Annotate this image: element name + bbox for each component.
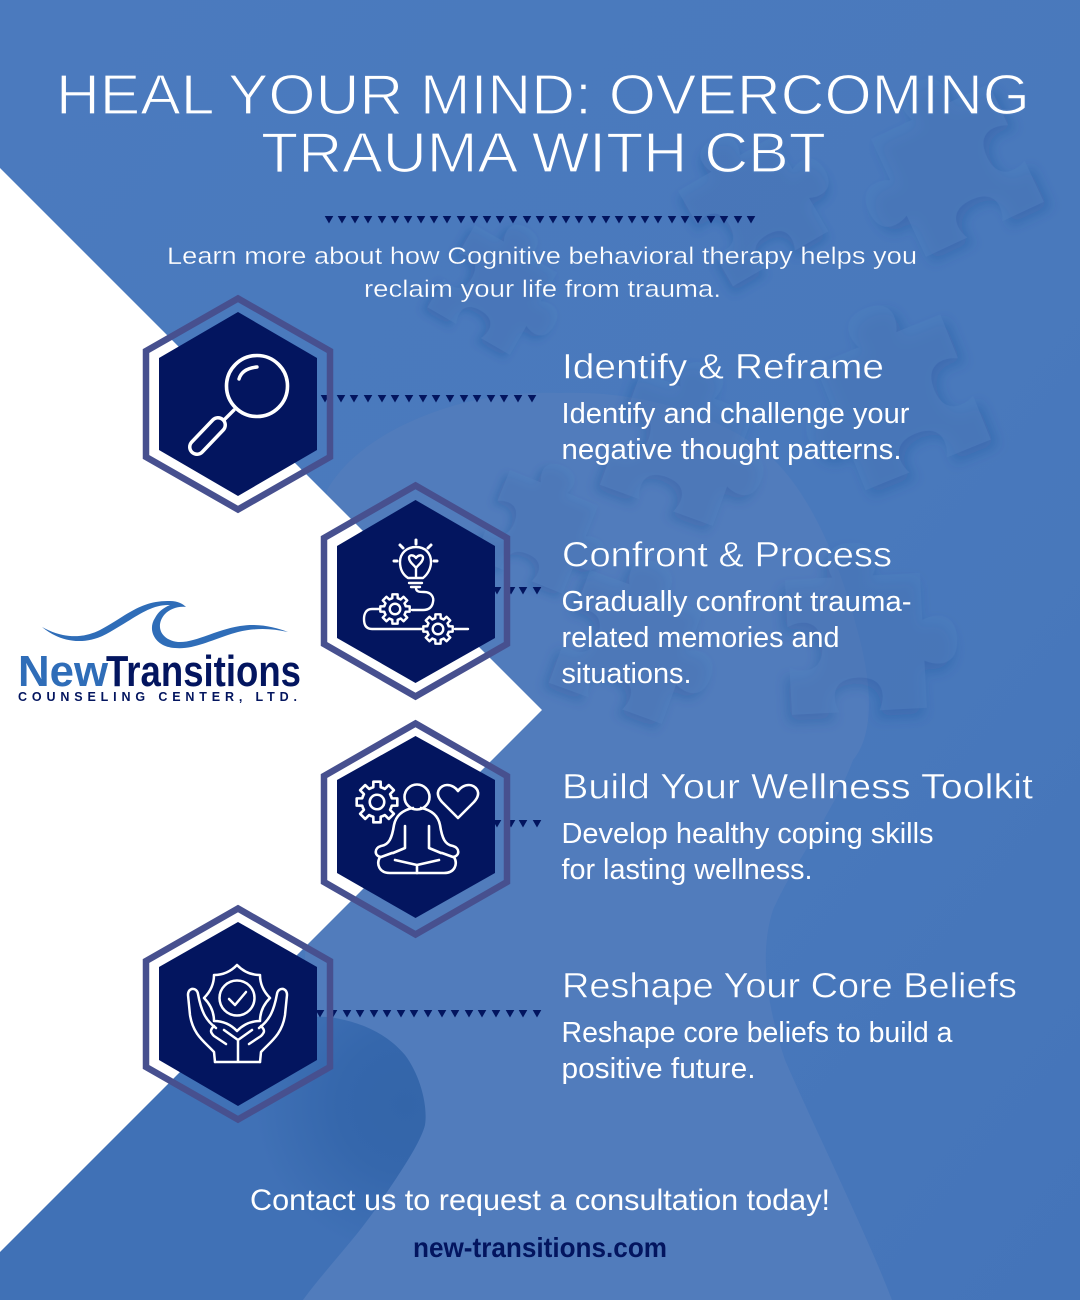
subtitle: reclaim your life from trauma. — [364, 276, 721, 303]
icon: hands holding badge — [188, 965, 287, 1062]
contact call to action: Contact us to request a consultation today! — [250, 1184, 830, 1217]
icon: lightbulb and gears — [364, 540, 468, 644]
title — [56, 63, 1030, 185]
hexagon: step 2 lightbulb and gears — [324, 486, 507, 696]
step 3 text: Develop healthy coping skills — [562, 818, 934, 850]
step 4 text: Reshape Your Core Beliefs — [562, 966, 1017, 1006]
connector: step 2 — [493, 587, 541, 594]
step 4 text — [562, 966, 1017, 1085]
puzzle pieces background — [428, 55, 1044, 734]
logo tagline: COUNSELING CENTER, LTD. — [18, 690, 297, 704]
step 2 text: related memories and — [562, 622, 840, 654]
step 2 text — [562, 536, 912, 690]
step 3 text: Build Your Wellness Toolkit — [562, 768, 1033, 806]
step 3 text: for lasting wellness. — [562, 854, 812, 886]
step 1 text: Identify and challenge your — [562, 398, 910, 430]
hexagon: step 4 hands and badge — [146, 908, 330, 1120]
icon: magnifying glass — [197, 356, 288, 447]
connector: step 3 — [493, 820, 541, 828]
step 1 text — [562, 348, 910, 466]
step 2 text: situations. — [562, 658, 692, 690]
logo: New Transitions Counseling Center — [18, 601, 301, 704]
white diagonal panel — [0, 168, 542, 1252]
dark blue blob bottom left — [0, 1010, 426, 1300]
hexagon: step 3 meditation wellness — [324, 724, 507, 934]
website: new-transitions.com — [413, 1232, 667, 1263]
step 2 text: Gradually confront trauma- — [562, 586, 912, 618]
step 1 text: negative thought patterns. — [562, 434, 902, 466]
light blue blob — [303, 393, 892, 1300]
step 3 text — [562, 768, 1033, 886]
logo name: New — [18, 647, 109, 696]
title: TRAUMA WITH CBT — [261, 121, 826, 185]
icon: meditating person with gear and heart — [357, 782, 478, 873]
logo wave — [42, 601, 288, 648]
step 2 text: Confront & Process — [562, 536, 892, 574]
triangle divider — [325, 216, 755, 224]
hexagon: step 1 magnifying glass — [146, 298, 330, 510]
connector: step 1 — [321, 395, 536, 402]
subtitle: Learn more about how Cognitive behavioral therapy helps you — [167, 243, 917, 270]
title: HEAL YOUR MIND: OVERCOMING — [56, 63, 1030, 127]
subtitle — [167, 243, 917, 303]
connector: step 4 — [316, 1010, 541, 1018]
step 4 text: positive future. — [562, 1053, 756, 1085]
step 1 text: Identify & Reframe — [562, 348, 884, 386]
logo: New Transitions Counseling Center: Transitions — [106, 647, 301, 696]
step 4 text: Reshape core beliefs to build a — [562, 1017, 953, 1049]
